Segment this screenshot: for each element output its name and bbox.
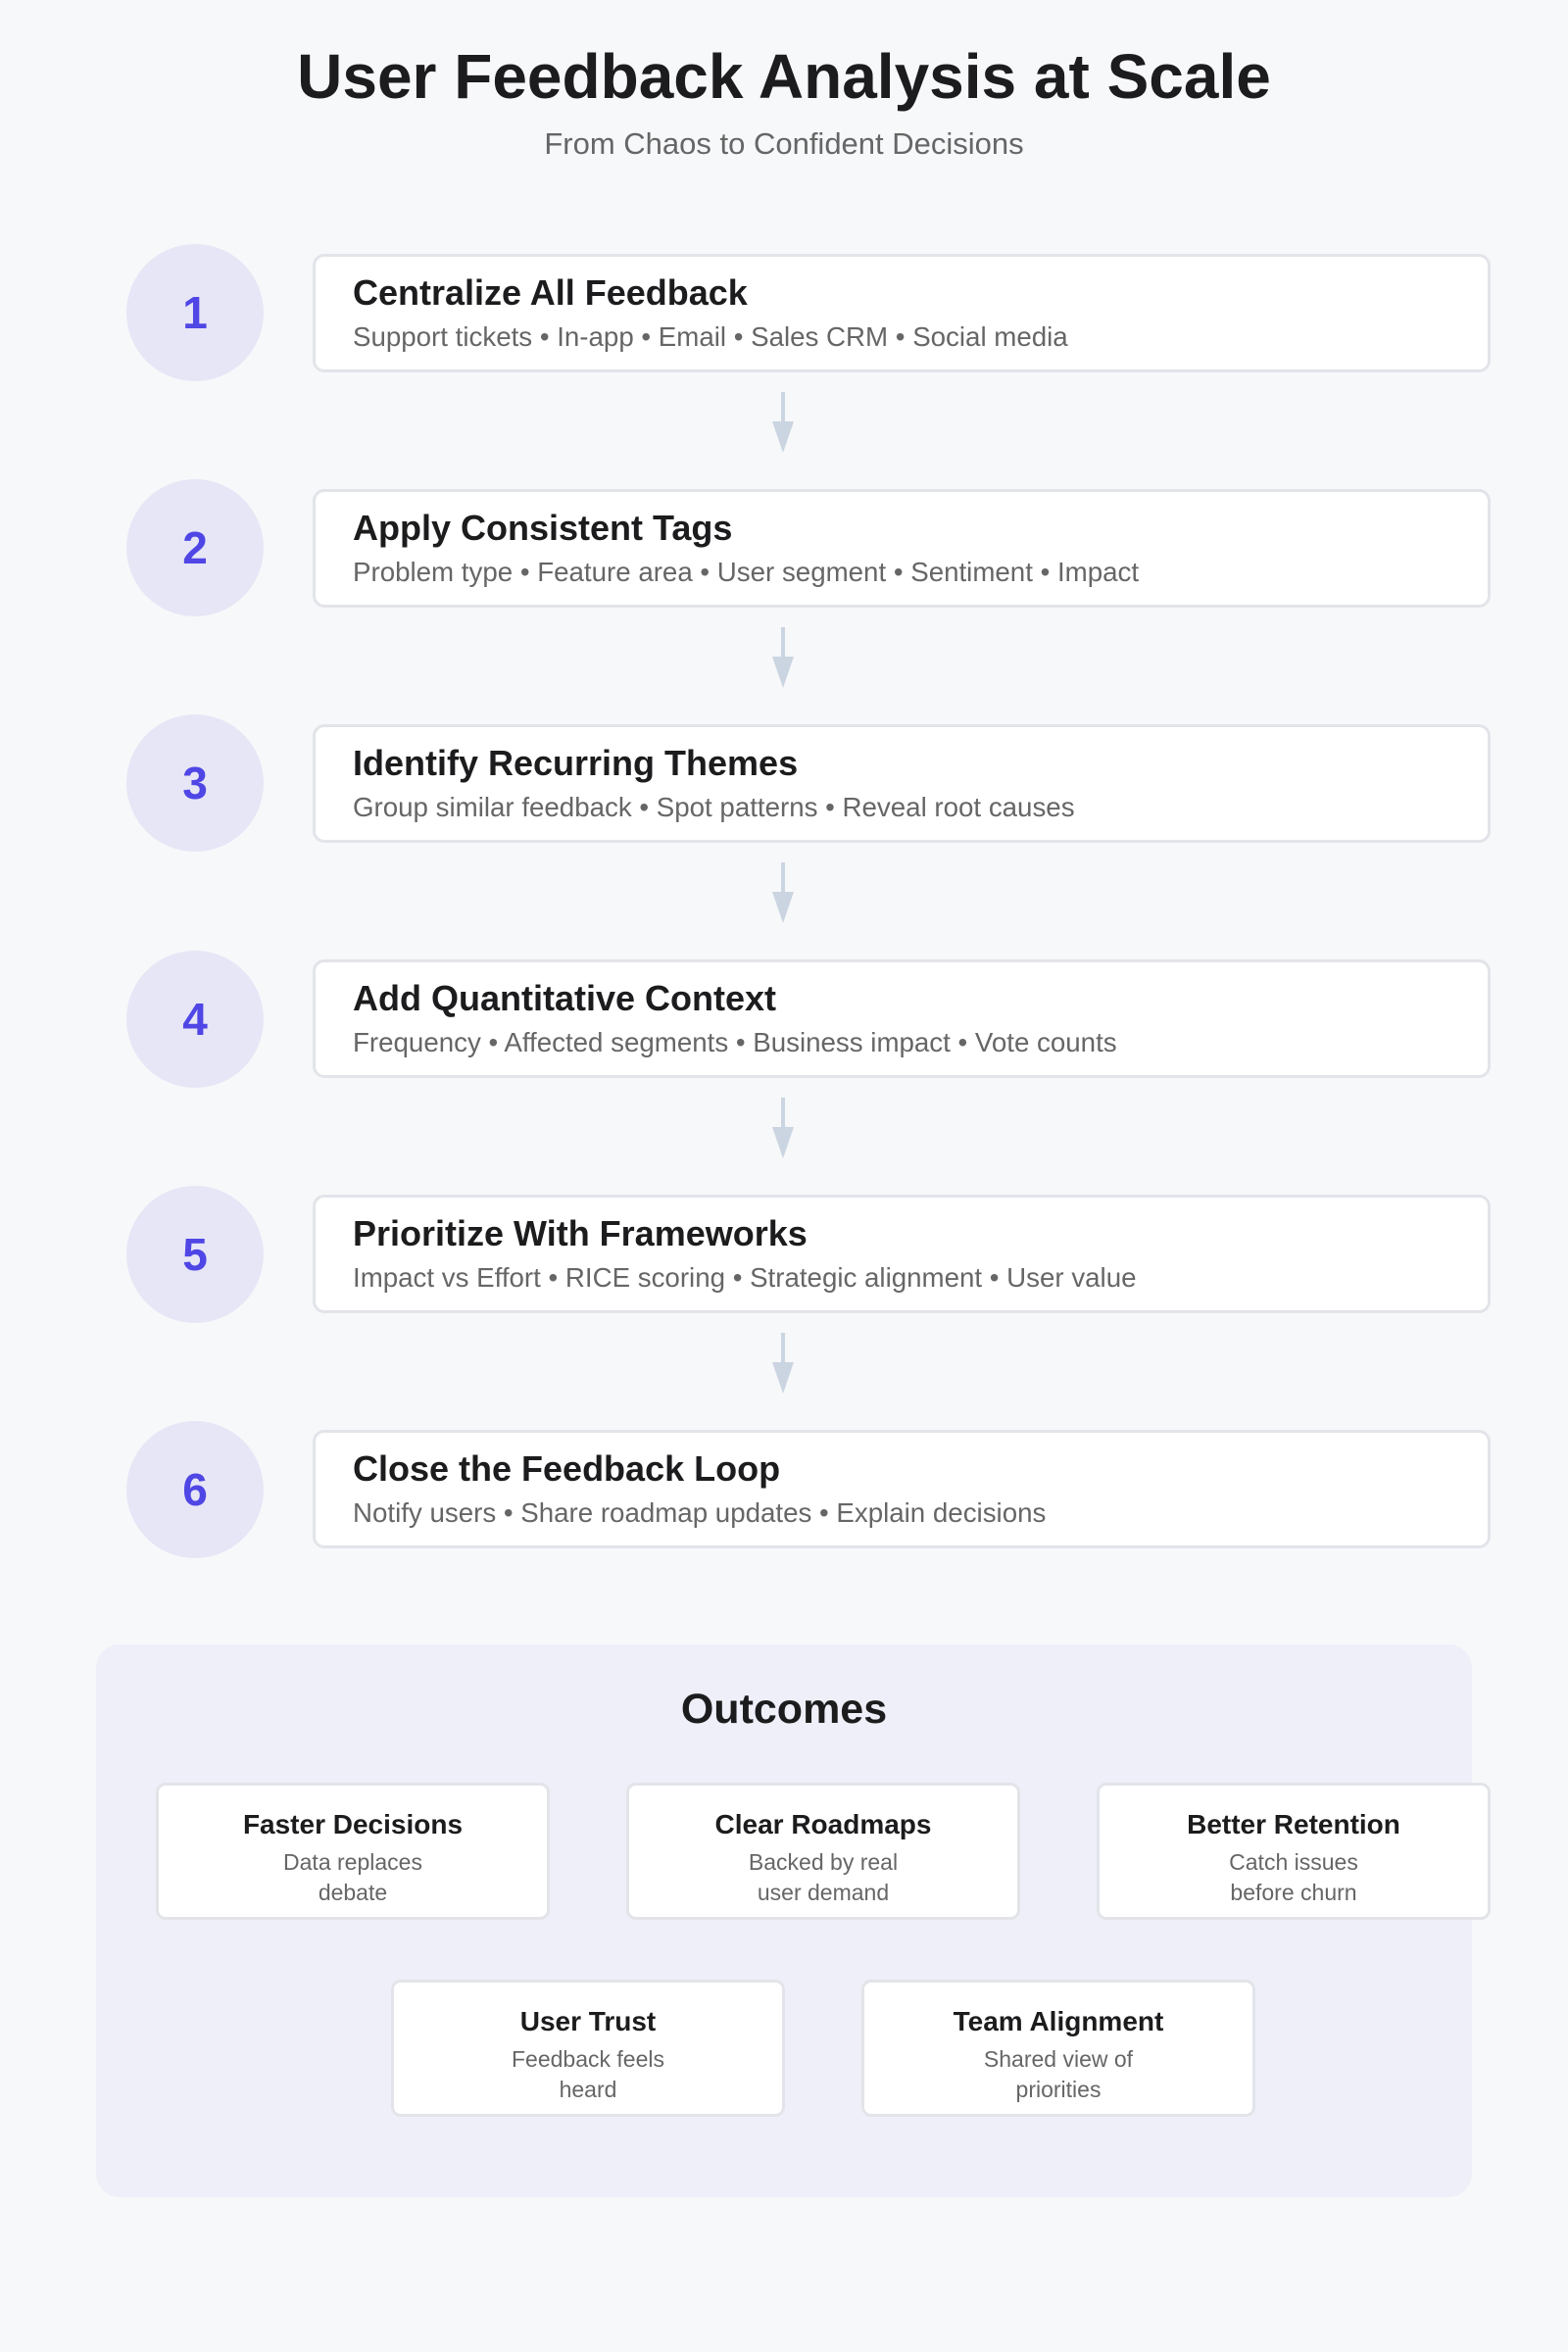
card: clear roadmaps: Clear Roadmaps <box>715 1809 931 1839</box>
arrow 4 <box>772 1098 794 1158</box>
step 1 number: 1 <box>182 287 208 338</box>
step 5 box: Prioritize With Frameworks <box>353 1213 808 1253</box>
step 3 box <box>313 724 1491 843</box>
step 4 box <box>313 959 1491 1078</box>
step 2 number <box>126 479 264 616</box>
card: team alignment: priorities <box>1016 2077 1101 2102</box>
outcomes heading: Outcomes <box>681 1686 887 1733</box>
step 4 box: Add Quantitative Context <box>353 978 776 1018</box>
card: faster decisions: debate <box>318 1880 387 1905</box>
card: team alignment: Team Alignment <box>954 2006 1163 2036</box>
step 2 number: 2 <box>182 522 208 573</box>
step 3 box: Identify Recurring Themes <box>353 743 798 783</box>
step 4 number <box>126 951 264 1088</box>
step 2 box: Apply Consistent Tags <box>353 508 732 548</box>
arrow 1 <box>772 392 794 453</box>
card: team alignment <box>861 1980 1255 2117</box>
step 3 number <box>126 714 264 852</box>
subtitle: From Chaos to Confident Decisions <box>544 126 1024 161</box>
step 5 box: Impact vs Effort • RICE scoring • Strategic alignment • User value <box>353 1262 1137 1293</box>
step 6 number: 6 <box>182 1464 208 1515</box>
card: team alignment: Shared view of <box>984 2046 1133 2072</box>
card: clear roadmaps <box>626 1783 1020 1920</box>
step 6 box: Notify users • Share roadmap updates • Explain decisions <box>353 1497 1046 1528</box>
step 3 number: 3 <box>182 758 208 808</box>
step 4 number: 4 <box>182 994 208 1045</box>
step 4 box: Frequency • Affected segments • Business impact • Vote counts <box>353 1027 1117 1057</box>
step 6 box <box>313 1430 1491 1548</box>
arrow 3 <box>772 862 794 923</box>
step 1 number <box>126 244 264 381</box>
step 5 number: 5 <box>182 1229 208 1280</box>
card: user trust <box>391 1980 785 2117</box>
card: better retention <box>1097 1783 1491 1920</box>
step 1 box <box>313 254 1491 372</box>
arrow 5 <box>772 1333 794 1394</box>
step 1 box: Support tickets • In-app • Email • Sales CRM • Social media <box>353 321 1068 352</box>
step 6 number <box>126 1421 264 1558</box>
card: faster decisions: Data replaces <box>283 1849 422 1875</box>
arrow 2 <box>772 627 794 688</box>
step 2 box <box>313 489 1491 608</box>
card: user trust: Feedback feels <box>512 2046 664 2072</box>
step 2 box: Problem type • Feature area • User segment • Sentiment • Impact <box>353 557 1139 587</box>
card: user trust: User Trust <box>520 2006 656 2036</box>
step 6 box: Close the Feedback Loop <box>353 1448 780 1489</box>
step 3 box: Group similar feedback • Spot patterns • Reveal root causes <box>353 792 1075 822</box>
step 1 box: Centralize All Feedback <box>353 272 748 313</box>
card: better retention: Better Retention <box>1187 1809 1400 1839</box>
card: faster decisions: Faster Decisions <box>243 1809 463 1839</box>
card: faster decisions <box>156 1783 550 1920</box>
step 5 number <box>126 1186 264 1323</box>
title: User Feedback Analysis at Scale <box>297 41 1271 112</box>
step 5 box <box>313 1195 1491 1313</box>
card: clear roadmaps: user demand <box>758 1880 889 1905</box>
card: user trust: heard <box>560 2077 616 2102</box>
card: clear roadmaps: Backed by real <box>749 1849 898 1875</box>
card: better retention: Catch issues <box>1229 1849 1358 1875</box>
card: better retention: before churn <box>1230 1880 1357 1905</box>
panel: outcomes <box>96 1644 1472 2197</box>
